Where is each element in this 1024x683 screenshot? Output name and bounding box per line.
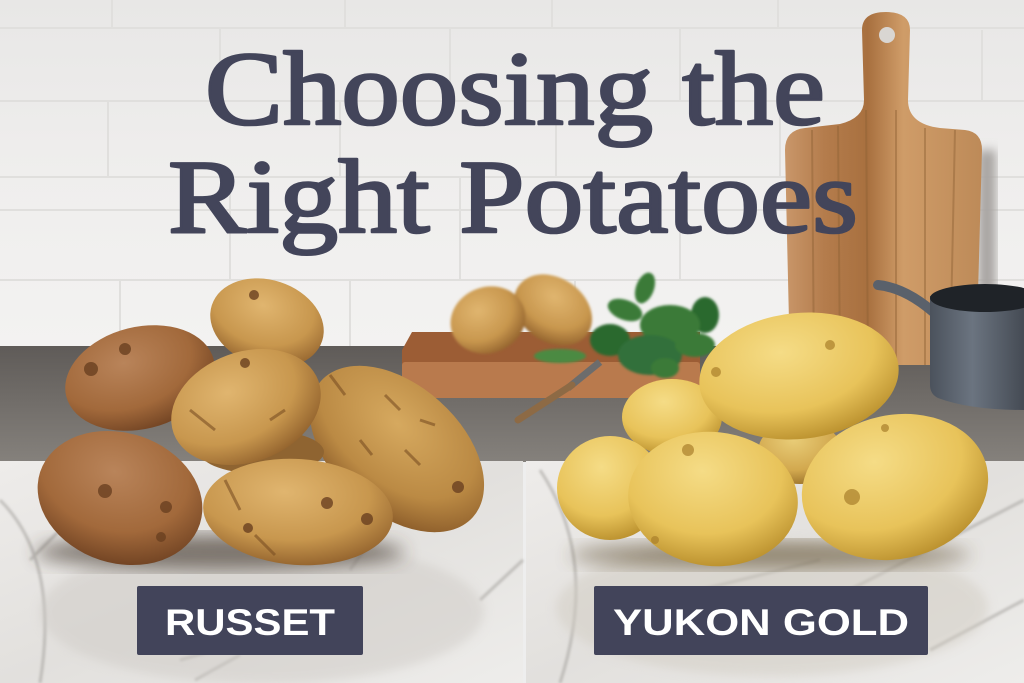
yukon gold potato pile bbox=[557, 303, 1002, 577]
yukon: top large bbox=[693, 303, 905, 449]
countertop bbox=[0, 346, 1024, 462]
russet: bottom left bbox=[20, 410, 220, 586]
background potatoes bbox=[441, 260, 606, 364]
label: russet bbox=[137, 586, 363, 655]
russet: bottom bbox=[200, 453, 396, 571]
small cutting board bbox=[402, 332, 700, 398]
yukon: right bbox=[788, 397, 1002, 577]
label: yukon gold bbox=[594, 586, 928, 655]
yukon: center bbox=[621, 423, 805, 575]
russet: long right bbox=[278, 333, 516, 565]
yukon: left bbox=[557, 436, 663, 540]
yukon: upper left bbox=[622, 379, 722, 455]
label: yukon gold: YUKON GOLD bbox=[613, 602, 909, 643]
russet: top bbox=[199, 264, 335, 382]
marble slab left bbox=[0, 461, 523, 683]
background wall tiles bbox=[0, 0, 1024, 346]
yukon: back small bbox=[758, 420, 842, 484]
cutting board with handle bbox=[785, 12, 996, 365]
russet: middle bbox=[155, 329, 337, 485]
knife bbox=[518, 362, 600, 420]
title bbox=[168, 30, 858, 255]
herbs bbox=[534, 270, 719, 378]
russet potato pile bbox=[20, 264, 516, 586]
russet: top left bbox=[54, 310, 226, 446]
marble slab right bbox=[526, 461, 1024, 683]
label: russet: RUSSET bbox=[165, 602, 335, 643]
title line 1: Choosing the bbox=[205, 30, 825, 147]
title line 2: Right Potatoes bbox=[168, 138, 858, 255]
saucepan bbox=[878, 284, 1024, 410]
